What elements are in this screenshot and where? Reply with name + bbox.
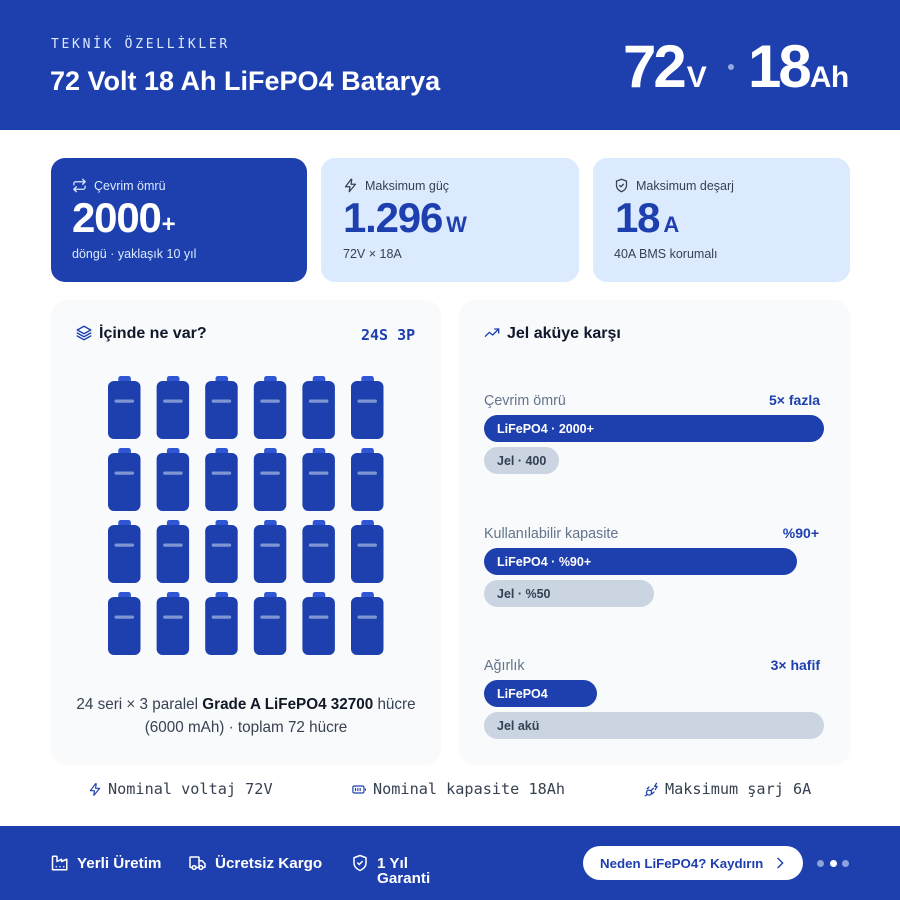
bar: gel usable capacity: Jel · %50	[497, 587, 551, 601]
card label: Maksimum deşarj	[636, 179, 734, 193]
icon: factory	[52, 856, 68, 870]
card value: 18A	[615, 194, 679, 241]
bar: LiFePO4 cycle life: LiFePO4 · 2000+	[497, 422, 594, 436]
card label: Çevrim ömrü	[94, 179, 166, 193]
icon: trending up	[484, 328, 500, 337]
separator dot	[728, 64, 734, 70]
bar: gel weight	[484, 712, 824, 739]
icon: shield check	[353, 854, 367, 872]
cell grid: 24 battery cells	[108, 376, 384, 655]
badge: one year warranty: Garanti	[377, 870, 430, 887]
bar: LiFePO4 usable capacity: LiFePO4 · %90+	[497, 555, 591, 569]
headline value: 18Ah: 18Ah	[748, 33, 849, 100]
icon: chevron right	[777, 858, 784, 868]
button: swipe call to action	[583, 846, 803, 880]
spec: nominal capacity: Nominal kapasite 18Ah	[373, 780, 565, 798]
stat card: max power	[321, 158, 579, 282]
spec: nominal voltage: Nominal voltaj 72V	[108, 780, 273, 798]
card note: 40A BMS korumalı	[614, 247, 718, 261]
panel: versus gel battery	[459, 300, 850, 765]
icon: bolt	[90, 783, 100, 796]
title: 72 Volt 18 Ah LiFePO4 Batarya	[50, 66, 440, 96]
cell description	[76, 696, 416, 736]
footer band	[0, 826, 900, 900]
icon: shield check	[616, 178, 628, 192]
card note: döngü · yaklaşık 10 yıl	[72, 247, 196, 261]
cell description: (6000 mAh) · toplam 72 hücre	[145, 719, 347, 736]
spec: max charge: Maksimum şarj 6A	[665, 780, 811, 798]
bar: gel cycle life	[484, 447, 559, 474]
eyebrow: technical specs: TEKNİK ÖZELLİKLER	[51, 37, 230, 52]
stat card: max discharge	[593, 158, 850, 282]
headline value: 72V: 72V	[623, 33, 707, 100]
badge: local production: Yerli Üretim	[77, 855, 161, 872]
card value: 1.296W	[343, 194, 467, 241]
icon: battery	[352, 785, 366, 794]
configuration tag: 24S 3P	[361, 326, 415, 344]
panel: what's inside	[51, 300, 441, 765]
card value: 2000+	[72, 194, 176, 241]
bar: gel weight: Jel akü	[497, 719, 539, 733]
bar: LiFePO4 usable capacity	[484, 548, 797, 575]
bar: LiFePO4 weight	[484, 680, 597, 707]
card label: Maksimum güç	[365, 179, 449, 193]
badge: one year warranty: 1 Yıl	[377, 855, 408, 872]
icon: bolt	[344, 178, 356, 192]
pagination dots	[817, 860, 849, 867]
row label: cycle life: Çevrim ömrü	[484, 393, 566, 409]
bar: LiFePO4 weight: LiFePO4	[497, 687, 548, 701]
row value: 5x more: 5× fazla	[769, 392, 820, 408]
cell description: 24 seri × 3 paralel Grade A LiFePO4 32700 hücre	[76, 696, 416, 713]
button label: Neden LiFePO4? Kaydırın	[600, 856, 763, 871]
header band	[0, 0, 900, 130]
row value: 3x lighter: 3× hafif	[771, 657, 820, 673]
badge: one year warranty	[377, 855, 430, 887]
panel heading: Jel aküye karşı	[507, 325, 621, 342]
stat card: cycle life	[51, 158, 307, 282]
row label: usable capacity: Kullanılabilir kapasite	[484, 526, 618, 542]
icon: charging plug	[644, 782, 658, 796]
bar: gel cycle life: Jel · 400	[497, 454, 546, 468]
card note: 72V × 18A	[343, 247, 402, 261]
icon: layers	[76, 326, 92, 340]
row label: weight: Ağırlık	[484, 658, 525, 674]
bar: LiFePO4 cycle life	[484, 415, 824, 442]
panel heading: İçinde ne var?	[99, 325, 207, 342]
badge: free shipping: Ücretsiz Kargo	[215, 855, 322, 872]
icon: truck	[189, 856, 206, 870]
row value: 90 percent plus: %90+	[783, 525, 819, 541]
icon: repeat arrows	[73, 178, 86, 192]
bar: gel usable capacity	[484, 580, 654, 607]
